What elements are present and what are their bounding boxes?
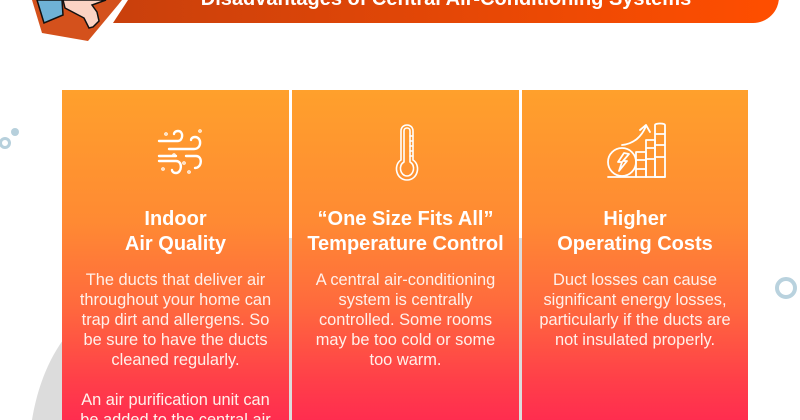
text: indoor air quality body: be sure to have the ducts [83,331,268,349]
text: operating costs body [539,271,731,349]
text: temperature control body: system is centrally [339,291,472,309]
text: temperature control body: too warm. [370,351,441,369]
text: temperature control body: controlled. Some rooms [319,311,492,329]
icon: thermometer [396,124,418,181]
icon: thumbs down badge [32,0,128,41]
text: indoor air quality body: throughout your home can [80,291,271,309]
panel: temperature control [292,90,519,420]
text: operating costs body: particularly if the ducts are [539,311,731,329]
decorative gray figure behind panels [32,238,522,420]
decorative ring right [775,277,797,299]
text: temperature control body: may be too cold or some [316,331,495,349]
text: indoor air quality body: cleaned regularly. [111,351,240,369]
text: indoor air quality body: An air purification unit can [81,391,270,409]
text: operating costs body: Duct losses can cause [553,271,717,289]
text: indoor air quality body [80,271,271,420]
panel: indoor air quality [62,90,289,420]
text: operating costs body: not insulated properly. [555,331,715,349]
heading: indoor air quality: Air Quality [125,233,226,255]
icon: wind and dust [158,129,202,174]
heading: indoor air quality: Indoor [144,208,207,230]
heading: operating costs: Operating Costs [557,233,713,255]
heading: temperature control [307,208,504,255]
text: indoor air quality body: The ducts that deliver air [86,271,265,289]
heading: operating costs [557,208,713,255]
text: operating costs body: significant energy losses, [543,291,727,309]
text: temperature control body: A central air-conditioning [316,271,495,289]
panel: operating costs [522,90,748,420]
heading: operating costs: Higher [603,208,667,230]
decorative dots top left [0,128,19,149]
heading: temperature control: Temperature Control [307,233,504,255]
text: temperature control body [316,271,495,369]
heading: indoor air quality [125,208,226,255]
heading: temperature control: “One Size Fits All” [318,208,493,230]
icon: rising costs chart [607,122,666,178]
header banner [113,0,779,23]
text: indoor air quality body: trap dirt and allergens. So [82,311,269,329]
